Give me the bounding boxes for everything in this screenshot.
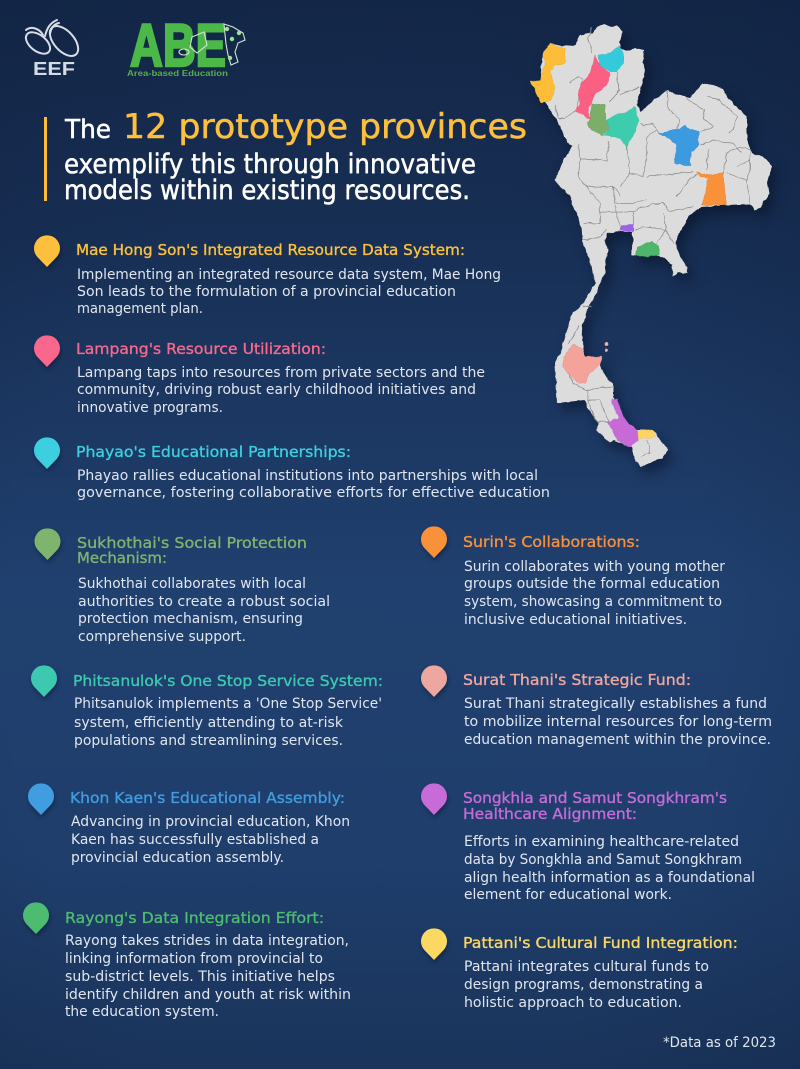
- item: Rayong: sub-district levels. This initiative helps: [65, 969, 335, 985]
- province: Sukhothai: [587, 103, 610, 135]
- item: Songkhla and Samut Songkhram: Efforts in examining healthcare-related: [464, 834, 739, 850]
- map province borders north and central: [530, 27, 750, 257]
- item: Mae Hong Son: [34, 235, 501, 317]
- item: Phitsanulok: [31, 665, 383, 749]
- item: Surat Thani: to mobilize internal resources for long-term: [464, 714, 772, 730]
- province: Phayao: [598, 46, 624, 72]
- item: Phayao: [34, 437, 550, 501]
- item: Songkhla and Samut Songkhram: [421, 783, 755, 903]
- item: Sukhothai: protection mechanism, ensuring: [78, 611, 303, 627]
- logo: EEF: [22, 20, 83, 79]
- item: Surat Thani: education management within the province.: [464, 732, 771, 748]
- item: Khon Kaen: Advancing in provincial education, Khon: [71, 814, 350, 830]
- item: Pattani: [421, 928, 738, 1011]
- item: Rayong: Rayong's Data Integration Effort:: [65, 909, 324, 927]
- item: Lampang: community, driving robust early childhood initiatives and: [77, 382, 476, 398]
- item: Lampang: Lampang's Resource Utilization:: [76, 340, 326, 358]
- item: Pattani: design programs, demonstrating a: [464, 977, 703, 993]
- item: Surin: system, showcasing a commitment to: [464, 594, 722, 610]
- title block: The: [64, 115, 111, 145]
- item: Phayao: Phayao rallies educational institutions into partnerships with local: [77, 468, 538, 484]
- item: Mae Hong Son: management plan.: [77, 301, 203, 317]
- item: Pattani: Pattani's Cultural Fund Integration:: [463, 934, 738, 952]
- title block: models within existing resources.: [64, 175, 470, 206]
- item: Songkhla and Samut Songkhram: align health information as a foundational: [464, 870, 755, 886]
- item: Mae Hong Son: Son leads to the formulation of a provincial education: [77, 284, 456, 300]
- item: Khon Kaen: Kaen has successfully established a: [71, 832, 319, 848]
- item: Rayong: linking information from provincial to: [65, 951, 323, 967]
- item: Surin: inclusive educational initiatives.: [464, 612, 687, 628]
- item: Pattani: Pattani integrates cultural funds to: [464, 959, 709, 975]
- item: Sukhothai: Sukhothai collaborates with local: [78, 576, 306, 592]
- map land outline: [530, 24, 772, 467]
- province: Rayong: [635, 242, 660, 257]
- item: Surat Thani: [421, 665, 772, 748]
- item: Songkhla and Samut Songkhram: data by Songkhla and Samut Songkhram: [464, 852, 742, 868]
- province: Pattani: [637, 429, 655, 438]
- logo: Area-based Education: ABE: [130, 12, 226, 79]
- item: Songkhla and Samut Songkhram: Songkhla and Samut Songkhram's: [463, 789, 727, 807]
- item: Sukhothai: authorities to create a robust social: [78, 594, 330, 610]
- item: Khon Kaen: [28, 783, 350, 866]
- item: Phayao: governance, fostering collaborative efforts for effective education: [77, 485, 550, 501]
- province: Surin: [697, 172, 726, 205]
- item: Songkhla and Samut Songkhram: Healthcare Alignment:: [463, 805, 637, 823]
- item: Sukhothai: Mechanism:: [77, 549, 167, 567]
- item: Rayong: [23, 902, 351, 1020]
- logo: EEF: EEF: [33, 59, 75, 79]
- item: Rayong: the education system.: [65, 1004, 219, 1020]
- item: Sukhothai: Sukhothai's Social Protection: [77, 534, 307, 552]
- title block: exemplify this through innovative: [64, 149, 476, 180]
- province: Samut Songkhram: [619, 225, 633, 232]
- item: Phitsanulok: Phitsanulok implements a 'One Stop Service': [74, 696, 382, 712]
- item: Phitsanulok: system, efficiently attending to at-risk: [74, 715, 344, 731]
- item: Lampang: Lampang taps into resources from private sectors and the: [77, 365, 485, 381]
- map islands: [604, 342, 608, 352]
- title block: [44, 107, 527, 206]
- province: Surat Thani: [563, 344, 602, 383]
- item: Phayao: Phayao's Educational Partnerships:: [76, 443, 351, 461]
- item: Rayong: Rayong takes strides in data integration,: [65, 933, 349, 949]
- item: Phitsanulok: Phitsanulok's One Stop Service System:: [73, 672, 383, 690]
- item: Lampang: innovative programs.: [77, 400, 223, 416]
- map province borders south: [563, 307, 655, 457]
- map of Thailand: [530, 24, 772, 467]
- province: Songkhla: [608, 398, 638, 447]
- item: Mae Hong Son: Implementing an integrated resource data system, Mae Hong: [77, 267, 501, 283]
- item: Surat Thani: Surat Thani's Strategic Fund:: [463, 671, 691, 689]
- province: Phitsanulok: [603, 107, 638, 147]
- item: Surin: Surin's Collaborations:: [463, 533, 640, 551]
- item: Rayong: identify children and youth at risk within: [65, 987, 351, 1003]
- item: Khon Kaen: Khon Kaen's Educational Assembly:: [70, 789, 345, 807]
- item: Sukhothai: comprehensive support.: [78, 629, 246, 645]
- item: Surin: Surin collaborates with young mother: [464, 559, 725, 575]
- province: Mae Hong Son: [530, 43, 566, 103]
- item: Surin: groups outside the formal education: [464, 576, 720, 592]
- province: Khon Kaen: [658, 125, 699, 167]
- item: Khon Kaen: provincial education assembly.: [71, 850, 284, 866]
- title block: 12 prototype provinces: [123, 107, 527, 147]
- item: Songkhla and Samut Songkhram: element for educational work.: [464, 887, 672, 903]
- item: Mae Hong Son: Mae Hong Son's Integrated Resource Data System:: [76, 241, 465, 259]
- item: Surin: [421, 526, 725, 628]
- item: Sukhothai: [34, 528, 330, 645]
- item: Phitsanulok: populations and streamlining services.: [74, 733, 343, 749]
- logo: Area-based Education: Area-based Education: [127, 68, 228, 78]
- item: Lampang: [34, 335, 485, 416]
- item: Surat Thani: Surat Thani strategically establishes a fund: [464, 696, 767, 712]
- province: Lampang: [575, 55, 610, 119]
- item: Pattani: holistic approach to education.: [464, 995, 682, 1011]
- footnote: *Data as of 2023: [663, 1035, 776, 1051]
